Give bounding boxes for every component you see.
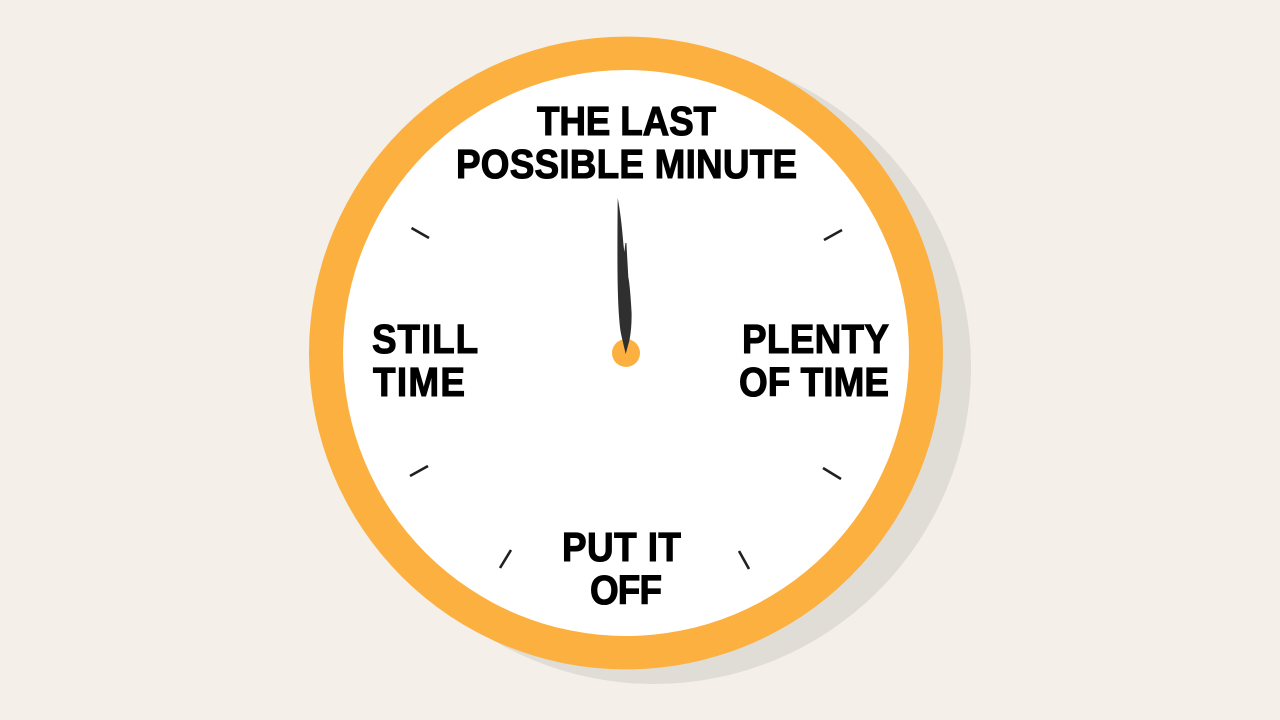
- label: plenty of time: [739, 317, 889, 405]
- clock drop shadow: [337, 50, 971, 684]
- hour tick marks: [410, 228, 842, 569]
- label: put it off: [562, 525, 681, 613]
- label: plenty of time: PLENTY: [742, 317, 889, 362]
- label: the last possible minute: POSSIBLE MINUTE: [456, 142, 797, 187]
- label: still time: STILL: [372, 317, 478, 362]
- label: put it off: PUT IT: [562, 525, 681, 570]
- label: still time: [372, 317, 478, 405]
- clock hands: [617, 198, 632, 354]
- label: plenty of time: OF TIME: [739, 360, 889, 405]
- label: put it off: OFF: [590, 568, 662, 613]
- clock orange rim: [309, 37, 943, 669]
- label: the last possible minute: THE LAST: [537, 99, 716, 144]
- clock white face: [343, 70, 909, 636]
- clock centre hub: [612, 339, 640, 367]
- label: the last possible minute: [456, 99, 797, 187]
- label: still time: TIME: [373, 360, 465, 405]
